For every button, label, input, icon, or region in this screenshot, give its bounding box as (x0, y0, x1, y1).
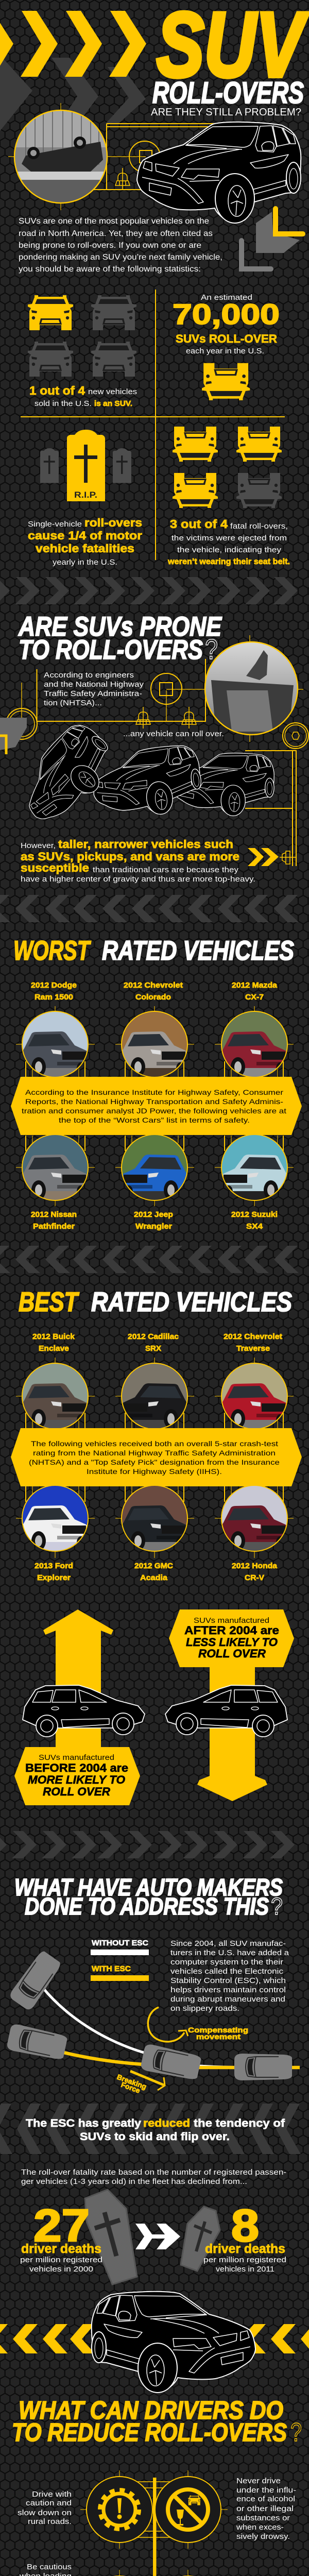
stat: fatalities text: roll-overs (84, 516, 142, 529)
labels: worst row 2: Pathfinder (33, 1222, 75, 1231)
stat: 1 out of 4 text: sold in the U.S. (35, 400, 92, 408)
labels: worst row 1: Colorado (135, 993, 171, 1002)
photo: Ford Explorer (21, 1485, 89, 1551)
icons: 3 of 4 overturned SUVs (173, 427, 282, 508)
chevron band (0, 895, 299, 922)
arrow: compensating movement (148, 2007, 188, 2042)
labels: best row 2: Explorer (37, 1573, 71, 1582)
tip text: loading (12, 2563, 72, 2576)
text: ESC explanation: during abrupt maneuvers and (170, 1995, 285, 2004)
chevron band (0, 577, 298, 604)
labels: best row 2: 2013 Ford (35, 1562, 73, 1570)
arrow: breaking force (130, 2071, 165, 2090)
stat: 1 out of 4 text: 1 out of 4 (29, 384, 85, 397)
hexagon: before 2004: MORE LIKELY TO (28, 1773, 125, 1786)
stat: seat belt text: fatal roll-overs, (230, 522, 288, 531)
text: according to engineers: Traffic Safety Administra- (44, 690, 142, 698)
label: breaking force: Breaking (116, 2073, 148, 2091)
stat: fatalities text: yearly in the U.S. (53, 558, 117, 567)
callout banner: worst cars (11, 1077, 302, 1135)
labels: best row 2: CR-V (245, 1573, 264, 1582)
stat: 8 driver deaths: driver deaths (205, 2242, 285, 2256)
icon: small coffin (181, 2207, 220, 2271)
car: exit (234, 2054, 292, 2080)
label: compensating movement (188, 2026, 248, 2041)
labels: worst row 1: CX-7 (245, 993, 264, 1002)
labels: best row 2: 2012 GMC (134, 1562, 173, 1570)
stat: fatalities text (28, 516, 143, 567)
stat: fatalities text: cause 1/4 of motor (28, 529, 143, 542)
labels: best row 1 (32, 1332, 282, 1353)
arrow: decline (135, 2224, 180, 2249)
stat: 1 out of 4 text: is an SUV. (94, 399, 132, 408)
blueprint frame, section 2 (6, 635, 308, 866)
heading: best rated vehicles (19, 1287, 292, 1317)
statement: ESC reduced: The ESC has greatly (26, 2117, 141, 2129)
labels: worst row 1: 2012 Dodge (31, 981, 77, 990)
text: any vehicle: ...any vehicle can roll over. (123, 730, 224, 738)
stat: 1 out of 4 icons (28, 295, 136, 377)
stat dividers (21, 290, 285, 560)
stat: 70,000 (173, 294, 280, 355)
stat: 27 driver deaths: driver deaths (21, 2242, 101, 2256)
hexagon: after 2004 (169, 1609, 294, 1667)
tip text: rural roads: slow down on (18, 2509, 72, 2517)
photo: Mazda CX-7 (220, 1011, 288, 1077)
side view SUV, left (23, 1685, 145, 1737)
photo: rolled vehicle and rescuer (205, 641, 298, 737)
heading: are SUVs prone: ? (205, 633, 218, 665)
text: according to engineers (44, 671, 144, 707)
statement: ESC reduced (26, 2117, 285, 2143)
text: fatality rate: ger vehicles (1-3 years old) in the fleet has declined from... (21, 2178, 247, 2186)
tips frame lines (80, 2470, 228, 2576)
stat: 27 driver deaths: per million registered (20, 2256, 102, 2264)
photo: GMC Acadia (121, 1485, 188, 1551)
text: ESC explanation: Stability Control (ESC), which (170, 1977, 286, 1985)
text: taller narrower vehicles: have a higher center of gravity and thus are more top-heavy. (21, 875, 255, 884)
labels: worst row 2: SX4 (246, 1222, 263, 1231)
heading: are SUVs prone: TO ROLL-OVERS (19, 635, 203, 665)
heading: what can drivers do (12, 2397, 302, 2447)
tip text: impaired driving: when exces- (236, 2523, 284, 2532)
corner arrow decoration (242, 209, 303, 269)
heading: what have auto makers (14, 1874, 283, 1920)
double chevron arrow (248, 848, 279, 866)
car: spinning without ESC (8, 1949, 63, 2012)
intro text (19, 217, 222, 274)
labels: worst row 2: Wrangler (135, 1222, 172, 1231)
labels: best row 2: 2012 Honda (232, 1562, 278, 1570)
heading: worst rated vehicles: WORST (13, 936, 91, 966)
photo: Honda CR-V (220, 1485, 288, 1551)
stat: 1 out of 4 text (29, 384, 137, 408)
label: breaking force: Force (120, 2080, 141, 2095)
stat: seat belt text: the vehicle, indicating they (177, 546, 282, 554)
callout banner: worst cars: According to the Insurance Institute for Highway Safety, Consumer (25, 1088, 283, 1096)
car: middle (140, 2043, 202, 2081)
car: start with ESC (6, 2023, 68, 2061)
hexagon: after 2004: SUVs manufactured (194, 1616, 269, 1625)
callout banner: worst cars: Reports, the National Highway Transportation and Safety Adminis- (25, 1097, 283, 1106)
text: taller narrower vehicles: susceptible (21, 861, 89, 874)
hexagon: after 2004: ROLL OVER (198, 1647, 266, 1660)
stat: 8 driver deaths: 8 (231, 2200, 259, 2251)
labels: best row 1: Enclave (39, 1344, 69, 1353)
SUV illustration, mirrored (92, 2292, 255, 2393)
tip text: impaired driving (236, 2477, 296, 2541)
photo: Chevrolet Colorado (121, 1011, 188, 1077)
hexagon: after 2004: AFTER 2004 are (184, 1624, 279, 1637)
stat: 1 out of 4 text: new vehicles (88, 388, 137, 396)
yellow title chevrons (0, 11, 146, 77)
tip text: impaired driving: under the influ- (236, 2486, 296, 2495)
icon: large coffin (85, 2190, 137, 2284)
side view SUV, right (165, 1685, 287, 1737)
legend: ESC: WITH ESC (92, 1964, 131, 1973)
heading: are SUVs prone: ARE SUVs PRONE (18, 612, 222, 642)
heading: what have auto makers: DONE TO ADDRESS THIS (25, 1893, 269, 1920)
photo: Suzuki SX4 (220, 1134, 288, 1200)
callout banner: best cars: Institute for Highway Safety (IIHS). (87, 1467, 222, 1476)
callout banner: best cars: rating from the National Highway Traffic Safety Administration (33, 1449, 276, 1457)
hexagon: before 2004: SUVs manufactured (39, 1753, 114, 1762)
icons: tombstones (40, 430, 131, 501)
tip text: impaired driving: Never drive (236, 2477, 281, 2485)
hero SUV illustration (137, 122, 301, 223)
photo: overturned SUV (14, 110, 107, 205)
photo: Cadillac SRX (121, 1363, 188, 1429)
chevron band (0, 1831, 295, 1858)
stat: 27 driver deaths (20, 2200, 102, 2274)
text: fatality rate: The roll-over fatality rate based on the number of registered passen- (21, 2168, 286, 2177)
tip text: rural roads: caution and (26, 2499, 72, 2507)
stat: seat belt text: 3 out of 4 (170, 517, 228, 531)
callout banner: best cars (11, 1428, 302, 1486)
diagram: ESC paths (23, 1987, 300, 2067)
intro text: you should be aware of the following statistics: (19, 265, 201, 274)
labels: best row 1: 2012 Chevrolet (224, 1332, 282, 1341)
stat: 8 driver deaths (203, 2200, 286, 2274)
tip text: impaired driving: sively drowsy. (236, 2533, 290, 2541)
heading: what have auto makers: ? (271, 1893, 283, 1920)
labels: best row 1: 2012 Cadillac (128, 1332, 179, 1341)
stat: 70,000: 70,000 (173, 298, 280, 330)
tip text: rural roads (18, 2490, 72, 2526)
large chevron band (0, 2104, 301, 2154)
text: taller narrower vehicles: than traditional cars are because they (93, 866, 239, 874)
labels: worst row 2: 2012 Suzuki (231, 1210, 278, 1219)
labels: worst row 2 (31, 1210, 278, 1231)
intro text: road in North America. Yet, they are often cited as (19, 229, 213, 238)
text: taller narrower vehicles: However, (21, 842, 56, 850)
text: ESC explanation: helps drivers maintain control (170, 1986, 286, 1994)
stat: fatalities text: Single-vehicle (28, 520, 82, 529)
labels: best row 1: SRX (145, 1344, 161, 1353)
text: ESC explanation: turers in the U.S. have added a (170, 1949, 289, 1957)
callout banner: worst cars: the top of the “Worst Cars” list in terms of safety. (59, 1116, 250, 1124)
heading: what can drivers do: ? (290, 2418, 302, 2447)
photo: Chevrolet Traverse (220, 1363, 288, 1429)
labels: best row 1: 2012 Buick (32, 1332, 75, 1341)
heading: best rated vehicles: BEST (19, 1287, 80, 1317)
tip text: impaired driving: or other illegal (236, 2505, 294, 2513)
tip text: impaired driving: ence of alcohol (236, 2495, 295, 2503)
stat: seat belt text: weren’t wearing their seat belt. (167, 557, 290, 566)
labels: best row 2: Acadia (140, 1573, 168, 1582)
arrow down: after 2004 (197, 1667, 267, 1801)
labels: best row 2 (35, 1562, 278, 1582)
legend: ESC (91, 1939, 149, 1981)
intro text: pondering making an SUV you’re next family vehicle, (19, 253, 222, 262)
stat: 8 driver deaths: vehicles in 2011 (216, 2265, 274, 2274)
hexagon: after 2004: LESS LIKELY TO (186, 1636, 278, 1649)
stat: 70,000: SUVs ROLL-OVER (176, 332, 277, 345)
blueprint frame behind hero car (8, 103, 216, 210)
labels: best row 1: Traverse (236, 1344, 270, 1353)
intro text: being prone to roll-overs. If you own one or are (19, 241, 201, 250)
statement: ESC reduced: the tendency of (194, 2117, 285, 2129)
stat: 70,000: An estimated (201, 294, 252, 302)
stat: seat belt text: the victims were ejected from (171, 534, 287, 543)
heading: worst rated vehicles (13, 936, 294, 966)
stat: 8 driver deaths: per million registered (203, 2256, 286, 2264)
labels: worst row 1: 2012 Mazda (232, 981, 278, 990)
labels: worst row 2: 2012 Nissan (31, 1210, 77, 1219)
labels: worst row 2: 2012 Jeep (134, 1210, 173, 1219)
stat: 27 driver deaths: vehicles in 2000 (29, 2265, 93, 2274)
labels: worst row 1 (31, 981, 278, 1002)
icon: overturned SUV (202, 363, 250, 400)
stat: fatalities text: vehicle fatalities (36, 542, 134, 555)
tip text: rural roads: rural roads. (28, 2518, 72, 2526)
tip icon: no drunk driving (155, 2477, 221, 2543)
callout banner: worst cars: tration and consumer analyst JD Power, the following vehicles are at (22, 1107, 286, 1115)
center pole (153, 2478, 157, 2576)
stat: seat belt text (167, 517, 290, 566)
tip text: rural roads: Drive with (32, 2490, 72, 2499)
text: according to engineers: According to engineers (44, 671, 134, 680)
frame lines: worst vehicles (16, 1006, 294, 1206)
legend: ESC: WITHOUT ESC (92, 1939, 148, 1947)
tip text: impaired driving: substances or (236, 2514, 290, 2522)
labels: worst row 1: 2012 Chevrolet (124, 981, 183, 990)
text: fatality rate (21, 2168, 286, 2186)
text: ESC explanation: on slippery roads. (170, 2005, 239, 2013)
rolling SUVs illustration (9, 717, 274, 835)
label: compensating movement: Compensating (188, 2026, 248, 2034)
frame lines: best vehicles (16, 1358, 294, 1558)
stat: 27 driver deaths: 27 (33, 2200, 90, 2251)
text: taller narrower vehicles: as SUVs, pickups, and vans are more (21, 850, 239, 863)
text: taller narrower vehicles: taller, narrower vehicles such (58, 838, 233, 851)
text: taller narrower vehicles (21, 838, 255, 884)
hexagon: before 2004 (14, 1747, 140, 1805)
arrow up: before 2004 (43, 1609, 113, 1748)
photo: Nissan Pathfinder (21, 1134, 89, 1200)
heading: are SUVs prone (18, 612, 222, 665)
text: ESC explanation: vehicles called the Electronic (170, 1968, 283, 1976)
photo: Jeep Wrangler (121, 1134, 188, 1200)
text: ESC explanation: Since 2004, all SUV manufac- (170, 1940, 286, 1948)
intro text: SUVs are one of the most popular vehicles on the (19, 217, 209, 226)
text: according to engineers: and the National Highway (44, 681, 144, 689)
text: ESC explanation (170, 1940, 289, 2013)
statement: ESC reduced: SUVs to skid and flip over. (80, 2131, 230, 2143)
photo: Buick Enclave (21, 1363, 89, 1429)
hexagon: before 2004: BEFORE 2004 are (25, 1761, 128, 1774)
labels: worst row 1: Ram 1500 (35, 993, 73, 1002)
text: ESC explanation: computer system to the their (170, 1958, 283, 1967)
subtitle: ARE THEY STILL A PROBLEM? (151, 106, 301, 118)
tip icon: gear warning (87, 2477, 152, 2543)
gray background chevrons (0, 55, 146, 131)
yellow chevrons behind SUV (0, 2324, 309, 2353)
callout banner: best cars: The following vehicles received both an overall 5-star crash-test (31, 1439, 278, 1448)
corner decoration, left (0, 718, 27, 754)
photo: Dodge Ram (21, 1011, 89, 1077)
hexagon: before 2004: ROLL OVER (43, 1785, 110, 1798)
callout banner: best cars: (NHTSA) and a "Top Safety Pick" designation from the Insurance (29, 1458, 280, 1466)
tip text: loading: Be cautious (27, 2563, 72, 2571)
chevron band (0, 1246, 299, 1273)
statement: ESC reduced: reduced (143, 2117, 190, 2129)
icons: tombstones: R.I.P. (74, 490, 97, 500)
stat: 70,000: each year in the U.S. (186, 347, 264, 355)
label: compensating movement: movement (196, 2032, 241, 2041)
text: according to engineers: tion (NHTSA)... (44, 699, 102, 707)
